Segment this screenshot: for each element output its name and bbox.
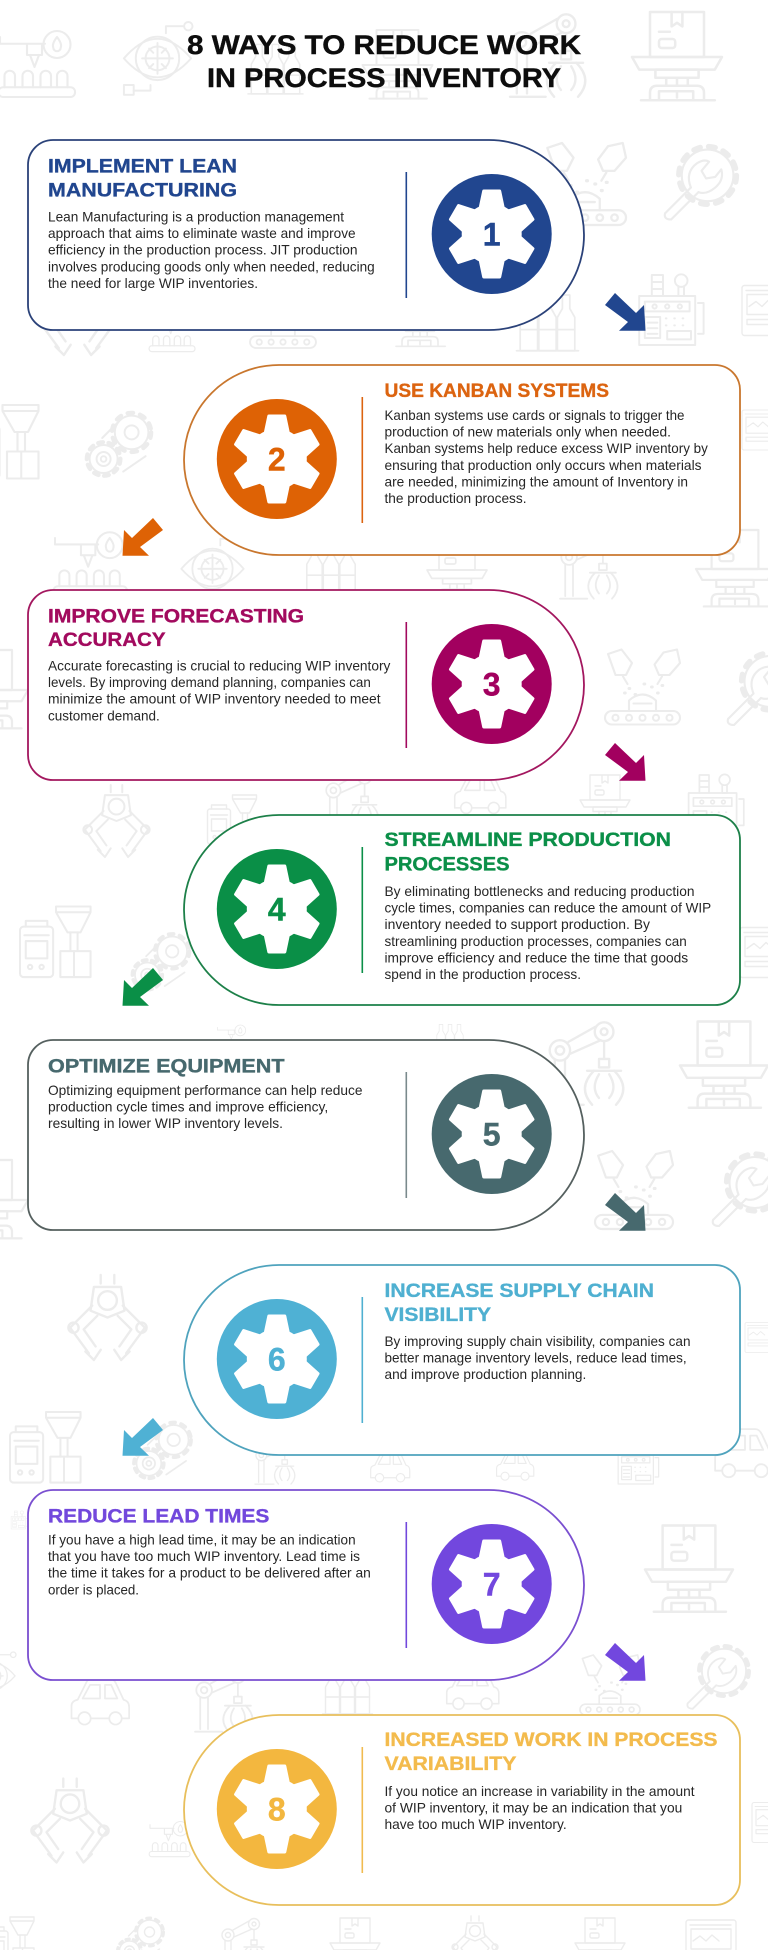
body text (384, 883, 711, 982)
body text (48, 1082, 363, 1131)
panel: step 7 reduce lead times (28, 1490, 646, 1681)
body text (384, 1333, 690, 1382)
arrow (605, 1193, 646, 1231)
arrow (122, 1418, 163, 1456)
icon: gear with number 5 (432, 1074, 552, 1194)
body text: have too much WIP inventory. (384, 1816, 567, 1832)
panel: step 3 improve forecasting accuracy (28, 590, 646, 781)
body text: If you notice an increase in variability in the amount (384, 1783, 695, 1799)
body text: By eliminating bottlenecks and reducing production (384, 883, 694, 899)
heading: INCREASED WORK IN PROCESS (384, 1730, 718, 1751)
body text (384, 407, 708, 506)
icon: gear with number 4 (217, 849, 337, 969)
body text: spend in the production process. (384, 966, 581, 982)
heading (384, 1730, 718, 1775)
body text: Kanban systems help reduce excess WIP inventory by (384, 440, 708, 456)
heading: OPTIMIZE EQUIPMENT (48, 1056, 285, 1078)
card outline (184, 365, 740, 555)
panel: step 1 implement lean manufacturing (28, 140, 646, 331)
arrow (122, 968, 163, 1006)
title: IN PROCESS INVENTORY (207, 63, 561, 93)
body text: Accurate forecasting is crucial to reducing WIP inventory (48, 658, 390, 674)
panel: step 8 increased work in process variability (184, 1715, 740, 1905)
body text (384, 1783, 695, 1832)
heading: VISIBILITY (384, 1305, 491, 1326)
panel: step 6 increase supply chain visibility (122, 1265, 740, 1456)
body text: better manage inventory levels, reduce lead times, (384, 1350, 687, 1366)
body text: are needed, minimizing the amount of Inventory in (384, 473, 688, 489)
body text: improve efficiency and reduce the time that goods (384, 949, 688, 965)
body text: production cycle times and improve efficiency, (48, 1099, 328, 1115)
heading: MANUFACTURING (48, 180, 237, 202)
panel: step 4 streamline production processes (122, 815, 740, 1006)
heading: REDUCE LEAD TIMES (48, 1506, 269, 1528)
body text: approach that aims to eliminate waste and improve (48, 225, 356, 241)
body text: streamlining production processes, companies can (384, 933, 687, 949)
card outline (28, 1490, 584, 1680)
heading (384, 830, 671, 876)
heading: USE KANBAN SYSTEMS (384, 381, 609, 402)
body text: and improve production planning. (384, 1366, 586, 1382)
icon: gear with number 6 (217, 1299, 337, 1419)
body text: customer demand. (48, 707, 160, 723)
body text: order is placed. (48, 1581, 139, 1597)
card outline (28, 1040, 584, 1230)
heading (48, 606, 304, 651)
heading: PROCESSES (384, 855, 510, 876)
icon: gear with number 6: 6 (268, 1342, 286, 1378)
card outline (184, 815, 740, 1005)
body text: efficiency in the production process. JIT production (48, 242, 358, 258)
body text: that you have too much WIP inventory. Lead time is (48, 1548, 360, 1564)
body text (48, 208, 375, 291)
card outline (184, 1715, 740, 1905)
panel: step 5 optimize equipment (28, 1040, 646, 1231)
body text: the time it takes for a product to be delivered after an (48, 1565, 371, 1581)
heading: INCREASE SUPPLY CHAIN (384, 1281, 654, 1302)
icon: gear with number 4: 4 (268, 892, 286, 928)
body text: the need for large WIP inventories. (48, 275, 258, 291)
heading: VARIABILITY (384, 1754, 517, 1775)
body text: resulting in lower WIP inventory levels. (48, 1115, 283, 1131)
icon: gear with number 2 (217, 399, 337, 519)
title: 8 WAYS TO REDUCE WORK (187, 30, 581, 60)
arrow (605, 293, 646, 331)
icon: gear with number 8: 8 (268, 1792, 286, 1828)
body text: inventory needed to support production. By (384, 916, 650, 932)
heading: IMPLEMENT LEAN (48, 156, 237, 178)
icon: gear with number 7 (432, 1524, 552, 1644)
arrow (122, 518, 163, 556)
body text: Kanban systems use cards or signals to trigger the (384, 407, 685, 423)
icon: gear with number 5: 5 (483, 1116, 501, 1152)
body text: Optimizing equipment performance can help reduce (48, 1082, 363, 1098)
body text: production of new materials only when needed. (384, 424, 671, 440)
title (187, 30, 581, 93)
body text: If you have a high lead time, it may be an indication (48, 1532, 356, 1548)
card outline (28, 140, 584, 330)
heading: IMPROVE FORECASTING (48, 606, 304, 628)
icon: gear with number 3: 3 (483, 666, 501, 702)
body text: Lean Manufacturing is a production management (48, 208, 344, 224)
panel: step 2 use kanban systems (122, 365, 740, 556)
icon: gear with number 3 (432, 624, 552, 744)
icon: gear with number 1 (432, 174, 552, 294)
card outline (184, 1265, 740, 1455)
body text: levels. By improving demand planning, companies can (48, 674, 371, 690)
heading: ACCURACY (48, 630, 166, 651)
body text: cycle times, companies can reduce the amount of WIP (384, 900, 711, 916)
body text (48, 658, 390, 723)
arrow (605, 743, 646, 781)
card outline (28, 590, 584, 780)
body text: ensuring that production only occurs when materials (384, 457, 702, 473)
arrow (605, 1643, 646, 1681)
heading (384, 1281, 654, 1326)
body text: involves producing goods only when needed, reducing (48, 258, 375, 274)
icon: gear with number 7: 7 (483, 1566, 501, 1602)
body text: minimize the amount of WIP inventory needed to meet (48, 691, 381, 707)
body text: the production process. (384, 490, 526, 506)
icon: gear with number 1: 1 (483, 216, 501, 252)
body text: By improving supply chain visibility, companies can (384, 1333, 690, 1349)
heading: STREAMLINE PRODUCTION (384, 830, 671, 851)
icon: gear with number 2: 2 (268, 442, 286, 478)
heading (48, 156, 237, 202)
body text: of WIP inventory, it may be an indication that you (384, 1800, 682, 1816)
body text (48, 1532, 371, 1597)
icon: gear with number 8 (217, 1749, 337, 1869)
